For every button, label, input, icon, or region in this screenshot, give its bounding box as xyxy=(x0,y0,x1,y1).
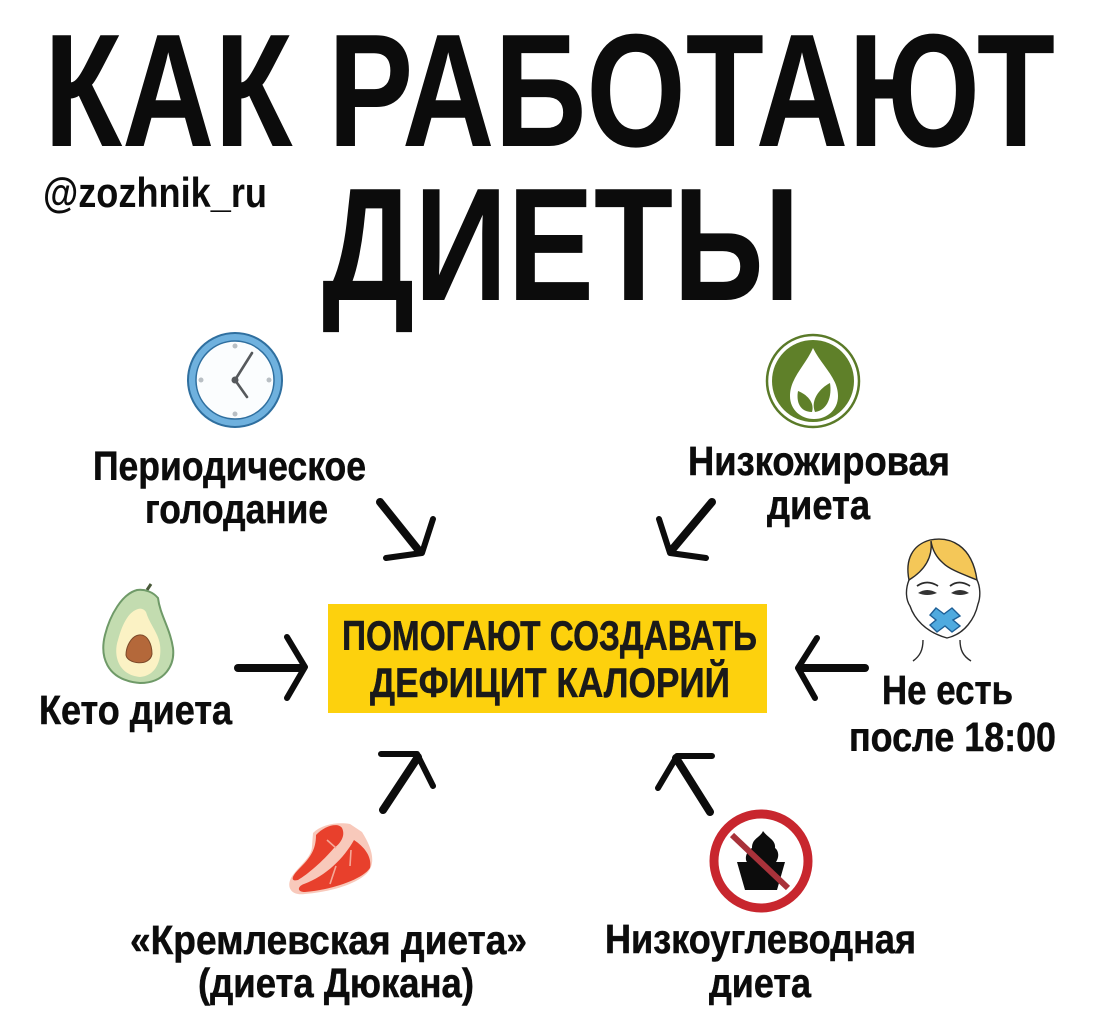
arrow: from keto xyxy=(238,637,305,698)
title xyxy=(44,1,1055,335)
label: low-carb diet: диета xyxy=(709,960,812,1006)
handle: @zozhnik_ru xyxy=(43,169,267,216)
label: Kremlin diet: «Кремлевская диета» xyxy=(130,917,527,963)
label: intermittent fasting: Периодическое xyxy=(93,443,366,489)
arrow: from intermittent fasting xyxy=(380,502,433,558)
title line 2: ДИЕТЫ xyxy=(322,155,800,335)
icon: steak xyxy=(289,823,372,894)
label: no eating after 18:00: после 18:00 xyxy=(849,714,1056,760)
arrow: from no eating after 18:00 xyxy=(798,638,865,698)
label: low-fat diet xyxy=(688,438,950,528)
callout line 2: ДЕФИЦИТ КАЛОРИЙ xyxy=(370,658,730,706)
callout line 1: ПОМОГАЮТ СОЗДАВАТЬ xyxy=(342,612,757,659)
icon: face with covered mouth xyxy=(906,539,980,661)
icon: avocado xyxy=(103,584,173,683)
arrow: from Kremlin diet xyxy=(381,754,433,810)
icon: clock xyxy=(188,333,282,427)
label: low-carb diet xyxy=(605,916,916,1006)
label: low-fat diet: диета xyxy=(767,482,871,528)
arrow: from low-carb diet xyxy=(658,756,712,812)
label: Kremlin diet xyxy=(130,917,527,1006)
label: low-carb diet: Низкоуглеводная xyxy=(605,916,916,962)
callout: calorie deficit xyxy=(328,604,767,713)
label: no eating after 18:00 xyxy=(849,667,1056,760)
arrow: from low-fat diet xyxy=(659,502,712,558)
icon: no carbs xyxy=(714,814,808,908)
label: intermittent fasting: голодание xyxy=(145,486,328,532)
label: no eating after 18:00: Не есть xyxy=(882,667,1013,713)
label: keto diet: Кето диета xyxy=(39,687,233,733)
label: Kremlin diet: (диета Дюкана) xyxy=(198,960,474,1006)
icon: low-fat drop xyxy=(767,335,859,427)
label: intermittent fasting xyxy=(93,443,366,532)
label: low-fat diet: Низкожировая xyxy=(688,438,950,484)
